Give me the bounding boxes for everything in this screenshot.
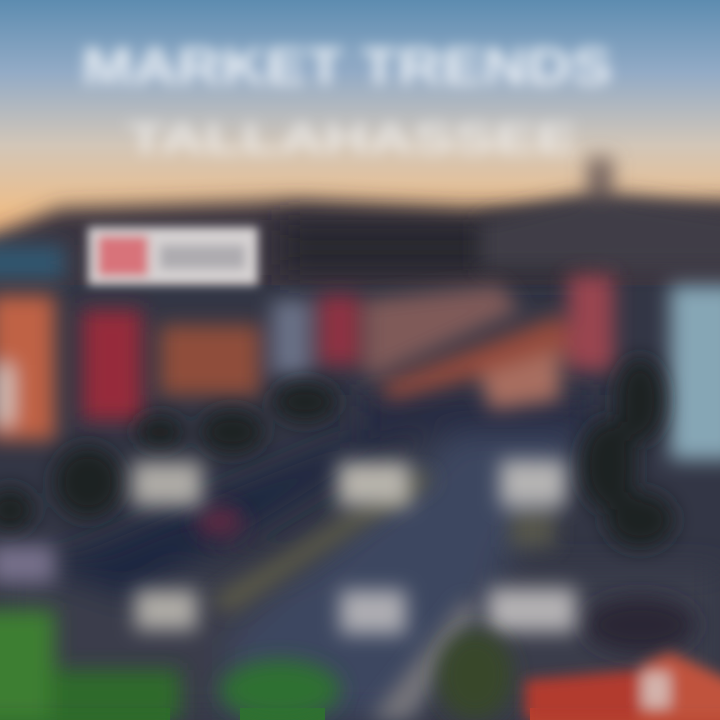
far building with tower [0,158,720,280]
road details [0,470,480,720]
sky background [0,0,720,290]
trees [0,358,695,653]
car light panels [132,460,576,634]
title line 2: TALLAHASSEE [127,114,577,163]
title [82,38,612,163]
title line 1: MARKET TRENDS [82,38,612,96]
storefront row [0,275,720,460]
billboard sign [88,227,258,285]
city street scene [0,158,720,720]
foreground trees and roofs [0,610,720,720]
